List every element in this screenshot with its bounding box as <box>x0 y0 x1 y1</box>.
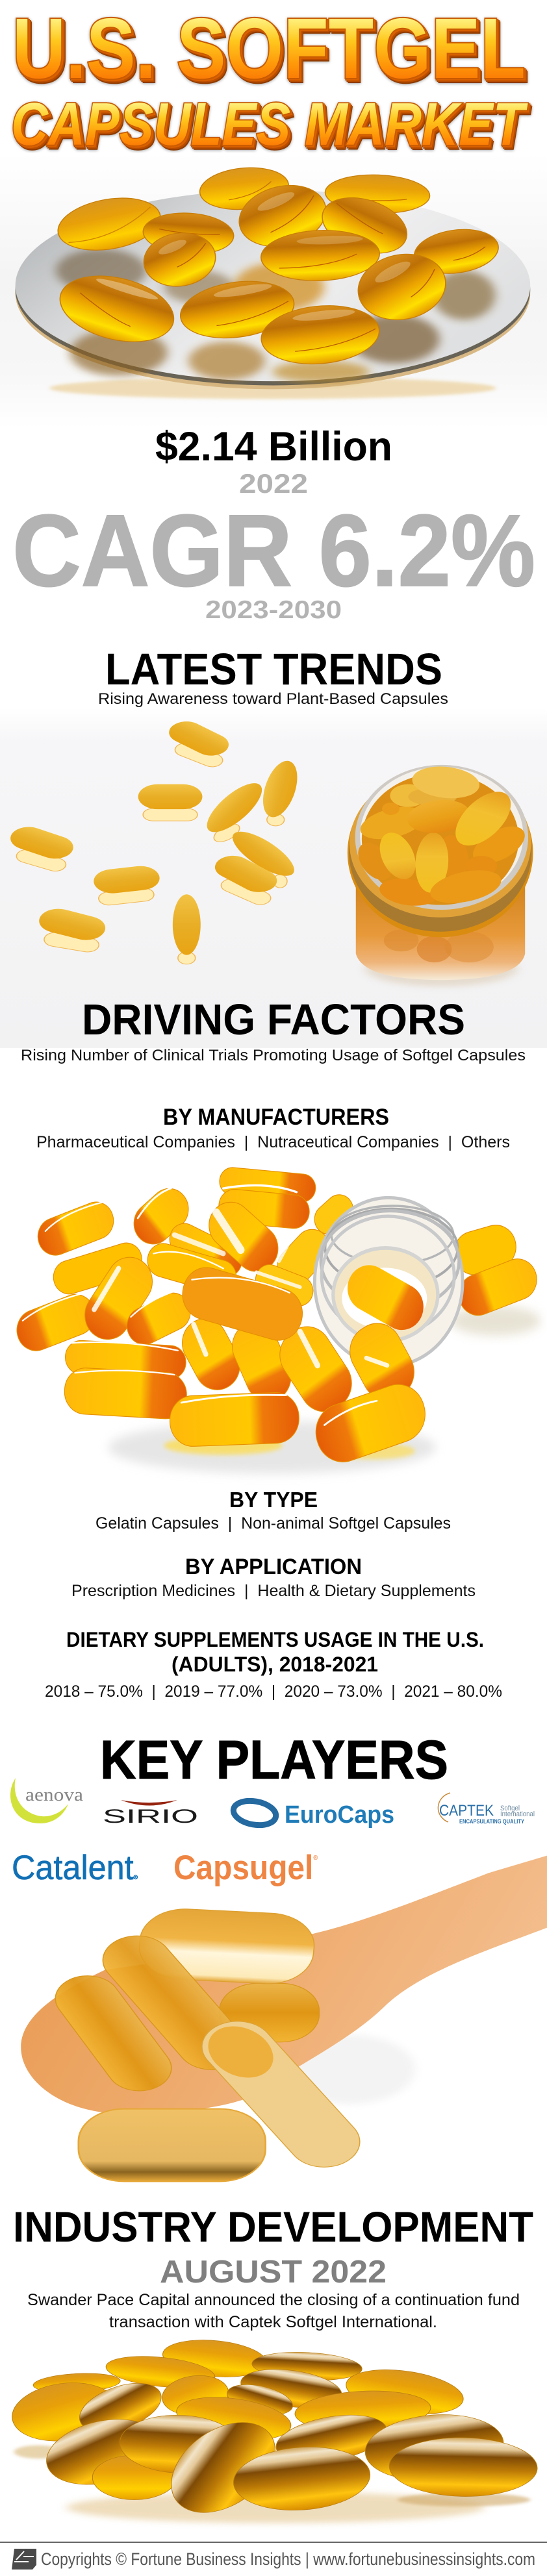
capsule lower right <box>342 241 462 333</box>
heading: driving factors: DRIVING FACTORS <box>82 995 465 1044</box>
segment list: application: Prescription Medicines | Health & Dietary Supplements <box>71 1582 476 1600</box>
logo: aenova <box>10 1778 83 1823</box>
illustration: capsules on wooden spoon <box>21 1856 547 2181</box>
segment heading: by application: BY APPLICATION <box>185 1555 362 1579</box>
forecast period: 2023-2030 <box>205 596 342 624</box>
title <box>11 1 528 158</box>
illustration: pile of amber softgels <box>0 2335 539 2523</box>
logo: Sirio: SIRIO <box>103 1806 198 1827</box>
trend text: Rising Awareness toward Plant-Based Capsules <box>98 690 448 708</box>
logo: Captek <box>438 1793 535 1825</box>
logo: Captek: International <box>500 1810 535 1818</box>
capsule centre left <box>141 210 236 257</box>
logo: Catalent: Catalent® <box>12 1849 138 1887</box>
development text: Swander Pace Capital announced the closing of a continuation fund <box>27 2291 520 2309</box>
icon: Fortune Business Insights logo <box>12 2549 36 2570</box>
illustration: capsules and glass jar <box>0 708 547 1048</box>
glass jar <box>348 762 535 986</box>
capsule long centre <box>90 1927 259 2079</box>
capsule left <box>44 1968 183 2099</box>
heading: dietary supplements usage <box>66 1628 484 1676</box>
logo: EuroCaps <box>231 1798 394 1829</box>
capsule upper right <box>310 186 420 264</box>
capsule front <box>79 2109 266 2181</box>
heading: dietary supplements usage: DIETARY SUPPLEMENTS USAGE IN THE U.S. <box>66 1628 484 1651</box>
footer rule <box>0 2542 547 2543</box>
logo: aenova: aenova <box>25 1784 83 1805</box>
capsule far right <box>409 223 503 279</box>
heading: key players: KEY PLAYERS <box>100 1729 448 1790</box>
capsule lower centre <box>173 273 301 345</box>
capsule dark amber <box>220 1983 319 2042</box>
capsule pale top <box>136 1907 317 1986</box>
logo: Sirio <box>103 1800 198 1827</box>
driving factor text: Rising Number of Clinical Trials Promoting Usage of Softgel Capsules <box>21 1047 526 1064</box>
heading: latest trends: LATEST TRENDS <box>105 644 442 694</box>
development text <box>27 2291 520 2331</box>
scattered capsules <box>4 717 304 964</box>
capsule long pale <box>188 2012 374 2177</box>
logo: Capsugel: ® <box>313 1855 318 1862</box>
logo: Captek: Softgel <box>500 1805 520 1812</box>
heading: dietary supplements usage: (ADULTS), 2018-2021 <box>172 1653 378 1676</box>
capsule centre <box>259 228 381 283</box>
segment heading: by manufacturers: BY MANUFACTURERS <box>163 1105 389 1130</box>
base year: 2022 <box>239 468 308 499</box>
development date: AUGUST 2022 <box>160 2255 387 2290</box>
segment list: manufacturers: Pharmaceutical Companies | Nutraceutical Companies | Others <box>36 1133 510 1151</box>
capsule highlights <box>23 1185 387 1425</box>
illustration: softgel capsules on a mirrored plate <box>0 153 547 429</box>
logo: EuroCaps: EuroCaps <box>285 1801 394 1829</box>
capsule lower left <box>47 264 186 354</box>
capsule upper centre <box>225 173 340 258</box>
development text: transaction with Captek Softgel International. <box>109 2313 437 2331</box>
glass bottle <box>314 1197 463 1366</box>
logo: Captek: CAPTEK <box>439 1802 494 1819</box>
logo: Captek: ENCAPSULATING QUALITY <box>459 1818 525 1825</box>
segment heading: by type: BY TYPE <box>229 1488 318 1512</box>
capsule left <box>51 190 168 258</box>
capsule back right <box>324 173 431 216</box>
capsule small left <box>131 223 228 297</box>
wooden spoon <box>21 1856 547 2114</box>
capsule back left <box>196 164 292 214</box>
segment list: type: Gelatin Capsules | Non-animal Softgel Capsules <box>95 1514 451 1532</box>
dietary supplement usage figures: 2018 – 75.0% | 2019 – 77.0% | 2020 – 73.0% | 2021 – 80.0% <box>45 1682 502 1701</box>
illustration: orange capsules spilling from bottle <box>12 1166 542 1473</box>
logo: Capsugel: Capsugel <box>173 1849 329 1887</box>
capsule front <box>257 300 384 369</box>
market size value: $2.14 Billion <box>155 424 392 469</box>
